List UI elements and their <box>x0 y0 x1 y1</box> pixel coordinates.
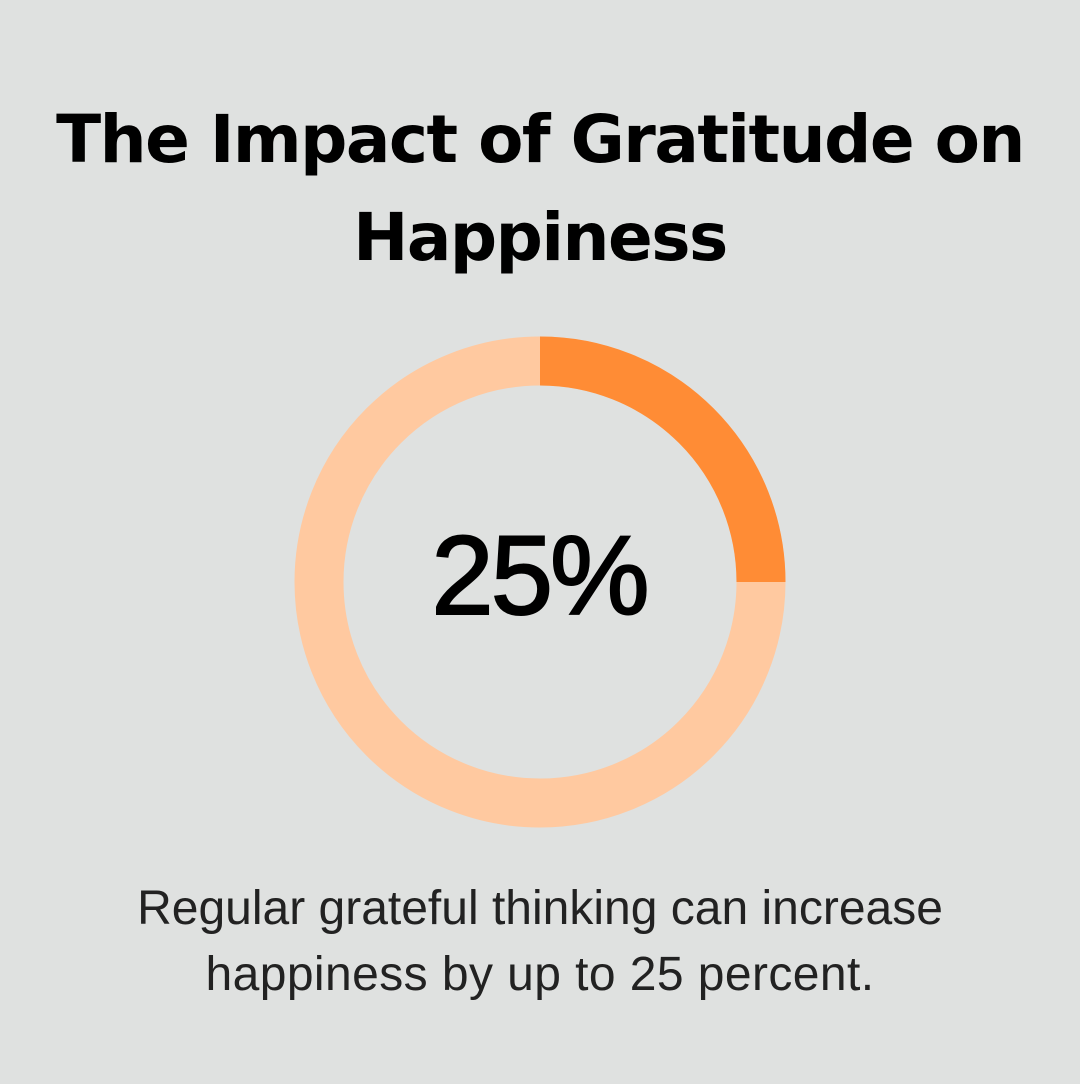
donut value segment: 25% <box>540 361 761 582</box>
caption: happiness by up to 25 percent. <box>205 948 875 1001</box>
title: Happiness <box>353 199 727 276</box>
title <box>56 101 1024 276</box>
donut track <box>319 361 761 803</box>
center value: 25% <box>431 513 647 638</box>
caption <box>137 882 943 1001</box>
title: The Impact of Gratitude on <box>56 101 1024 178</box>
caption: Regular grateful thinking can increase <box>137 882 943 935</box>
